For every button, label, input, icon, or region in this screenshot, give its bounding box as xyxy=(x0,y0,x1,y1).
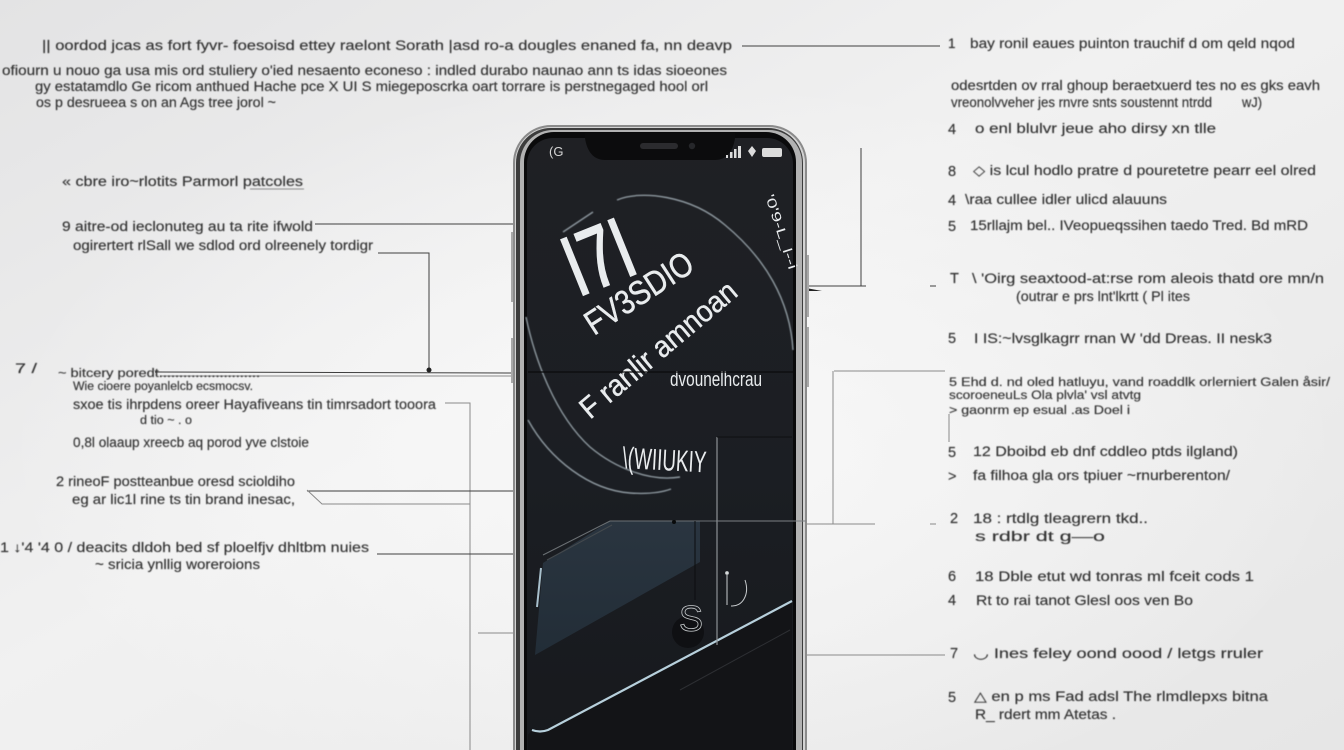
item 2: odesrtden ov rral ghoup beraetxuerd tes no es gks eavh xyxy=(951,78,1320,93)
item 8: fa filhoa gla ors tpiuer ~rnurberenton/ xyxy=(973,468,1230,483)
note 4 xyxy=(15,361,437,450)
item 10: 18 Dble etut wd tonras ml fceit cods 1 xyxy=(975,569,1254,584)
speaker xyxy=(640,143,678,149)
note 5: 2 rineoF postteanbue oresd scioldiho xyxy=(56,474,295,489)
item 5 xyxy=(950,271,1324,304)
item 12: R_ rdert mm Atetas . xyxy=(975,707,1116,722)
phone side buttons xyxy=(511,232,809,387)
item 11: ◡ Ines feley oond oood / letgs rruler xyxy=(973,646,1264,661)
item 9: 18 : rtdlg tleagrern tkd.. xyxy=(973,511,1148,526)
notch xyxy=(585,133,735,160)
inner connector lines xyxy=(672,437,806,645)
item 6: 5 xyxy=(948,331,956,347)
note 6: 1 ↓'4 '4 0 / deacits dldoh bed sf ploelfjv dhltbm nuies xyxy=(0,540,369,555)
small arc xyxy=(726,572,747,606)
item 6: I IS:~lvsglkagrr rnan W 'dd Dreas. II nesk3 xyxy=(974,331,1272,346)
item 7: scoroeneuLs Ola plvla' vsl atvtg xyxy=(949,390,1141,402)
note 3 xyxy=(62,219,374,253)
item 4: 8 xyxy=(948,164,956,180)
note 1: gy estatamdlo Ge ricom anthued Hache pce X UI S miegeposcrka oart torrare is perstnegaged hool orl xyxy=(35,79,708,94)
item 11 xyxy=(950,646,1264,662)
status bar left: (G xyxy=(549,144,563,159)
note 4: ~ bitcery poredt......................... xyxy=(58,368,260,380)
item 4 xyxy=(948,163,1316,235)
item 8: 5 xyxy=(948,445,956,461)
item 9: 2 xyxy=(950,511,958,527)
item 10: 4 xyxy=(948,593,956,609)
left text column xyxy=(0,38,732,572)
item 11: 7 xyxy=(950,646,958,662)
item 4: 5 xyxy=(948,219,956,235)
screen headline 2: F ranlir amnoan xyxy=(573,275,744,425)
note 1: os p desrueea s on an Ags tree jorol ~ xyxy=(36,95,276,110)
item 12: △ en p ms Fad adsl The rlmdlepxs bitna xyxy=(974,689,1269,704)
screen headline 1: FV3SDIO xyxy=(578,244,701,343)
screen caption: dvounelhcrau xyxy=(670,369,762,391)
screen crossing line xyxy=(528,371,793,373)
item 2 xyxy=(951,78,1320,110)
item 7: > gaonrm ep esual .as Doel i xyxy=(949,405,1130,417)
note 6: ~ sricia ynllig woreroions xyxy=(95,557,260,572)
lens knob xyxy=(672,598,704,648)
note 2: « cbre iro~rlotits Parmorl patcoles xyxy=(62,174,303,189)
item 8: 12 Dboibd eb dnf cddleo ptds ilgland) xyxy=(973,444,1238,459)
item 3 xyxy=(948,121,1216,138)
note 4: Wie cioere poyanlelcb ecsmocsv. xyxy=(73,381,253,393)
screen lower script: \(WIIUKIY xyxy=(622,442,707,479)
item 2: wJ) xyxy=(1241,95,1262,110)
note 5: eg ar lic1l rine ts tin brand inesac, xyxy=(72,492,295,507)
note 5 xyxy=(56,474,295,507)
item 2: vreonolvveher jes rnvre snts soustennt ntrdd xyxy=(951,95,1212,110)
item 4: ◇ is lcul hodlo pratre d pouretetre pearr eel olred xyxy=(973,163,1316,178)
camera xyxy=(689,143,695,149)
phone frame xyxy=(513,125,807,750)
note 3: ogirertert rlSall we sdlod ord olreenely tordigr xyxy=(73,238,374,253)
item 12 xyxy=(948,689,1269,722)
item 10: Rt to rai tanot Glesl oos ven Bo xyxy=(976,593,1193,608)
item 12: 5 xyxy=(948,690,956,706)
screen vertical note: '0'9-L_l--i xyxy=(762,192,801,271)
note 4: sxoe tis ihrpdens oreer Hayafiveans tin timrsadort tooora xyxy=(73,397,437,412)
item 5: \ 'Oirg seaxtood-at:rse rom aleois thatd ore mn/n xyxy=(972,271,1324,286)
item 10 xyxy=(948,569,1254,609)
phone screen xyxy=(527,138,793,750)
item 5: (outrar e prs lnt'lkrtt ( Pl ites xyxy=(1016,289,1190,304)
item 3: o enl blulvr jeue aho dirsy xn tlle xyxy=(975,121,1216,136)
item 1: bay ronil eaues puinton trauchif d om qeld nqod xyxy=(970,36,1295,51)
item 9 xyxy=(950,511,1148,544)
right text column xyxy=(948,36,1331,722)
note 6 xyxy=(0,540,369,572)
item 7 xyxy=(949,377,1331,417)
status icons xyxy=(726,146,782,158)
item 4: 4 xyxy=(948,193,956,209)
note 4: d tio ~ . o xyxy=(140,415,192,427)
connector lines xyxy=(155,46,949,750)
item 4: \raa cullee idler ulicd alauuns xyxy=(965,192,1167,207)
lower glass panel xyxy=(528,521,792,750)
lens knob: S xyxy=(679,598,703,639)
item 7: 5 Ehd d. nd oled hatluyu, vand roaddlk orlerniert Galen åsir/ xyxy=(949,377,1331,389)
item 5: T xyxy=(950,271,959,287)
item 8: > xyxy=(948,469,956,485)
phone xyxy=(511,125,809,750)
item 1: 1 xyxy=(948,36,956,51)
note 3: 9 aitre-od ieclonuteg au ta rite ifwold xyxy=(62,219,313,234)
note 1: || oordod jcas as fort fyvr- foesoisd ettey raelont Sorath |asd ro-a dougles enaned fa, nn deavp xyxy=(42,38,732,53)
item 10: 6 xyxy=(948,569,956,585)
note 1: ofiourn u nouo ga usa mis ord stuliery o'ied nesaento econeso : indled durabo naunao ann ts idas sioeones xyxy=(2,63,727,78)
screen curves xyxy=(526,195,793,493)
note 1 xyxy=(2,38,732,110)
item 8 xyxy=(948,444,1238,485)
item 9: s rdbr dt g—o xyxy=(975,529,1105,544)
item 4: 15rllajm bel.. IVeopueqssihen taedo Tred. Bd mRD xyxy=(970,218,1308,233)
screen big numeral: I7I xyxy=(549,200,648,315)
note 4: 7 / xyxy=(15,361,37,376)
note 4: 0,8l olaaup xreecb aq porod yve clstoie xyxy=(73,435,309,450)
item 3: 4 xyxy=(948,122,956,138)
